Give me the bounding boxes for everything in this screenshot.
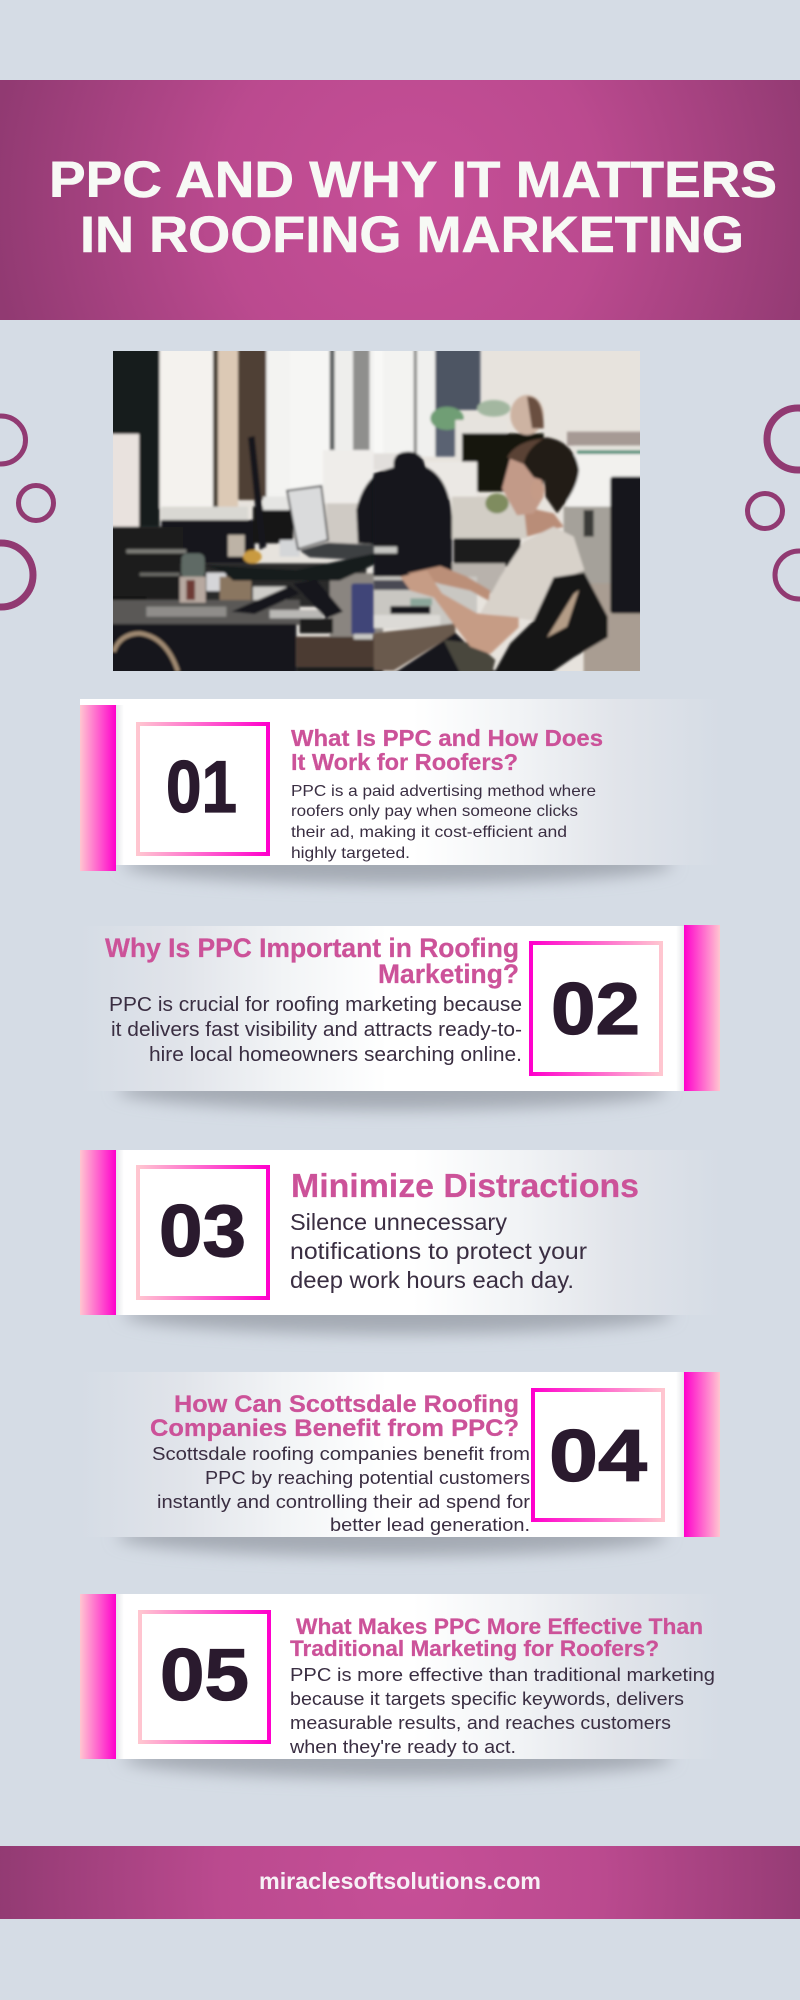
body text 02: PPC is crucial for roofing marketing because xyxy=(109,994,522,1016)
heading: Why Is PPC Important: Why Is PPC Important in Roofing xyxy=(105,933,519,963)
heading: How Can Scottsdale xyxy=(150,1391,519,1442)
body text 01: highly targeted. xyxy=(291,845,410,862)
body text 01: their ad, making it cost-efficient and xyxy=(291,824,567,841)
body text 01: PPC is a paid advertising method where xyxy=(291,783,596,800)
title: IN ROOFING MARKETING xyxy=(80,206,744,263)
footer website: miraclesoftsolutions.com xyxy=(259,1868,541,1894)
heading: What Is PPC: It Work for Roofers? xyxy=(291,749,518,775)
panel: step 04 xyxy=(80,1372,720,1556)
body text 05: measurable results, and reaches customers xyxy=(290,1713,671,1733)
body text 04: Scottsdale roofing companies benefit from xyxy=(152,1444,530,1464)
body text 01 xyxy=(291,783,596,862)
number 04: 04 xyxy=(549,1416,647,1497)
body text 03: notifications to protect your xyxy=(290,1238,587,1264)
body text 01: roofers only pay when someone clicks xyxy=(291,803,578,820)
heading: How Can Scottsdale: Companies Benefit from PPC? xyxy=(150,1415,519,1442)
title: PPC AND WHY IT MATTERS xyxy=(49,151,777,208)
body text 02 xyxy=(109,994,522,1066)
panel: step 02 xyxy=(80,925,720,1110)
heading: What Makes PPC xyxy=(290,1614,703,1661)
heading: What Makes PPC: Traditional Marketing for Roofers? xyxy=(290,1636,659,1661)
body text 05: when they're ready to act. xyxy=(289,1737,516,1757)
photo right half: man at desk xyxy=(374,347,647,673)
number 05: 05 xyxy=(160,1635,249,1716)
heading: Why Is PPC Important xyxy=(105,933,519,989)
body text 02: hire local homeowners searching online. xyxy=(149,1044,522,1066)
body text 04: PPC by reaching potential customers xyxy=(205,1468,530,1488)
panel: step 01 xyxy=(80,699,720,884)
heading: What Makes PPC: What Makes PPC More Effective Than xyxy=(296,1614,703,1639)
body text 05 xyxy=(289,1665,715,1757)
photo: man working at a computer in an office xyxy=(110,347,647,674)
number 03: 03 xyxy=(159,1191,246,1272)
panel: step 03 xyxy=(80,1150,720,1334)
number 02: 02 xyxy=(551,969,640,1050)
body text 05: PPC is more effective than traditional marketing xyxy=(290,1665,715,1685)
body text 02: it delivers fast visibility and attracts ready-to- xyxy=(111,1019,522,1041)
heading: How Can Scottsdale: How Can Scottsdale Roofing xyxy=(174,1391,519,1418)
heading: Minimize Distractions: Minimize Distractions xyxy=(291,1167,639,1204)
body text 03: Silence unnecessary xyxy=(290,1209,508,1235)
heading: What Is PPC: What Is PPC and How Does xyxy=(291,725,603,751)
body text 03 xyxy=(290,1209,587,1293)
decorative circles: right xyxy=(748,408,800,599)
body text 03: deep work hours each day. xyxy=(290,1267,574,1293)
body text 04: better lead generation. xyxy=(330,1515,530,1535)
decorative circles: left xyxy=(0,416,54,607)
header banner xyxy=(0,80,800,320)
number 01: 01 xyxy=(166,747,237,828)
body text 04 xyxy=(152,1444,530,1535)
heading: What Is PPC xyxy=(291,725,603,775)
heading: Why Is PPC Important: Marketing? xyxy=(378,959,519,989)
body text 04: instantly and controlling their ad spend for xyxy=(157,1492,530,1512)
photo left half: windows and desk xyxy=(110,347,383,674)
body text 05: because it targets specific keywords, delivers xyxy=(290,1689,684,1709)
footer banner xyxy=(0,1846,800,1919)
title xyxy=(49,151,777,263)
panel: step 05 xyxy=(80,1594,720,1778)
